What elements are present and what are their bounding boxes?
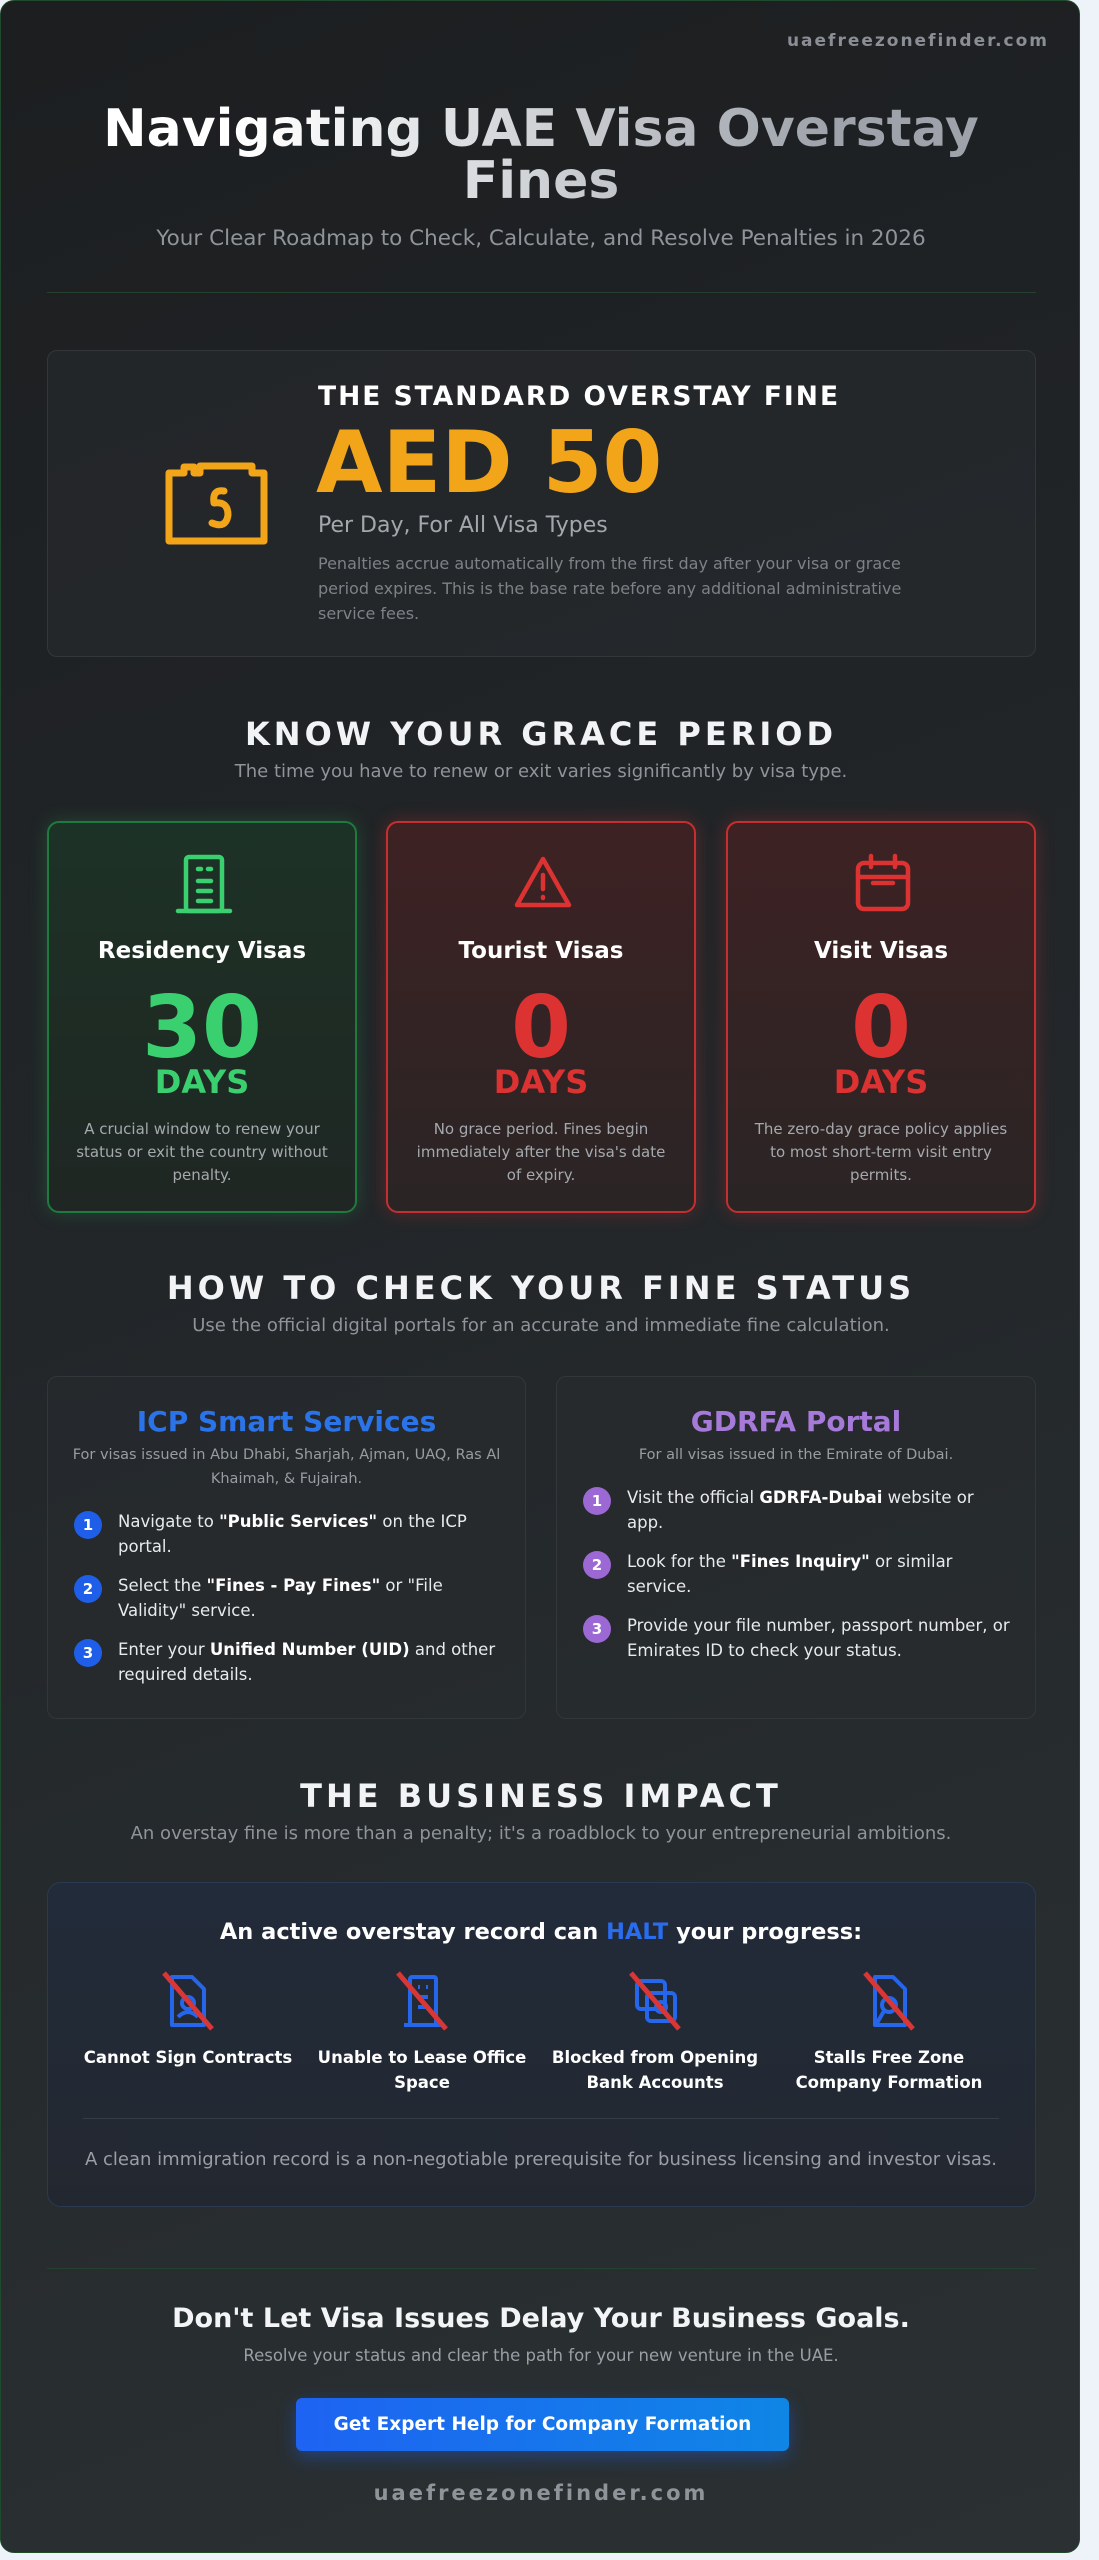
panel: ICP	[47, 1376, 526, 1719]
card: visit: DAYS	[834, 1063, 928, 1101]
card: residency: 30	[142, 978, 262, 1078]
heading: business impact: THE BUSINESS IMPACT	[300, 1777, 782, 1815]
description: Penalties accrue automatically from the first day after your visa or grace period expires. This is the base rate before any additional administrative service fees.	[318, 554, 901, 623]
step 3: 3	[592, 1620, 602, 1638]
impact: office	[318, 1971, 526, 2092]
CTA button: Get Expert Help for Company Formation	[334, 2414, 751, 2435]
panel: standard fine	[47, 350, 1036, 657]
impact: office: Unable to Lease Office Space	[318, 2048, 526, 2092]
watermark: top: uaefreezonefinder.com	[787, 31, 1049, 51]
ICP title: ICP Smart Services	[137, 1405, 436, 1438]
title: Navigating UAE Visa Overstay Fines	[103, 99, 979, 211]
per day: Per Day, For All Visa Types	[318, 513, 608, 538]
heading: how to check: HOW TO CHECK YOUR FINE STATUS	[167, 1269, 915, 1307]
subheading: An overstay fine is more than a penalty; it's a roadblock to your entrepreneurial ambitions.	[131, 1823, 951, 1844]
card: residency: A crucial window to renew your status or exit the country without penalty.	[76, 1120, 328, 1184]
heading: THE STANDARD OVERSTAY FINE	[318, 381, 840, 412]
big number: AED 50	[316, 413, 662, 513]
step 2: 2	[592, 1556, 602, 1574]
card: residency	[47, 821, 357, 1213]
panel: impact	[47, 1882, 1036, 2207]
subtitle: Your Clear Roadmap to Check, Calculate, and Resolve Penalties in 2026	[156, 226, 926, 251]
CTA sub: Resolve your status and clear the path for your new venture in the UAE.	[243, 2346, 839, 2365]
GDRFA title: GDRFA Portal	[691, 1405, 901, 1438]
impact footnote: A clean immigration record is a non-negotiable prerequisite for business licensing and investor visas.	[85, 2149, 997, 2170]
icon: building	[176, 854, 232, 914]
step 2: 2	[83, 1580, 93, 1598]
panel: GDRFA	[556, 1376, 1036, 1719]
heading: grace period: KNOW YOUR GRACE PERIOD	[245, 715, 837, 753]
icon: fine document	[166, 462, 268, 544]
card: tourist: 0	[511, 978, 571, 1078]
impact: free zone: Stalls Free Zone Company Formation	[796, 2048, 982, 2092]
card: visit: 0	[851, 978, 911, 1078]
ICP sub: For visas issued in Abu Dhabi, Sharjah, Ajman, UAQ, Ras Al Khaimah, & Fujairah.	[73, 1447, 500, 1487]
card: visit: The zero-day grace policy applies to most short-term visit entry permits.	[755, 1120, 1007, 1184]
step 3: Provide your file number, passport number, or Emirates ID to check your status.	[627, 1616, 1010, 1660]
step 2: Select the "Fines - Pay Fines" or "File Validity" service.	[118, 1576, 443, 1620]
GDRFA sub: For all visas issued in the Emirate of Dubai.	[639, 1447, 953, 1463]
card: tourist: Tourist Visas	[459, 938, 623, 964]
step 1: 1	[83, 1516, 93, 1534]
impact: bank: Blocked from Opening Bank Accounts	[552, 2048, 758, 2092]
card: residency: Residency Visas	[98, 938, 306, 964]
step 3: Enter your Unified Number (UID) and other required details.	[118, 1640, 495, 1684]
step 1: 1	[592, 1492, 602, 1510]
icon: calendar	[856, 854, 910, 912]
step 2: Look for the "Fines Inquiry" or similar service.	[627, 1552, 952, 1596]
subheading: Use the official digital portals for an accurate and immediate fine calculation.	[192, 1315, 890, 1336]
card: tourist: DAYS	[494, 1063, 588, 1101]
impact: contracts	[84, 1971, 292, 2067]
CTA heading: Don't Let Visa Issues Delay Your Business Goals.	[172, 2303, 910, 2334]
step 1: Visit the official GDRFA-Dubai website or app.	[627, 1488, 974, 1532]
card: visit: Visit Visas	[814, 938, 948, 964]
impact heading: An active overstay record can HALT your progress:	[220, 1919, 862, 1945]
card: visit	[726, 821, 1036, 1213]
footer url: uaefreezonefinder.com	[374, 2481, 708, 2505]
impact: free zone	[796, 1971, 982, 2092]
impact: contracts: Cannot Sign Contracts	[84, 2048, 292, 2067]
subheading: The time you have to renew or exit varies significantly by visa type.	[235, 761, 847, 782]
step 3: 3	[83, 1644, 93, 1662]
card: tourist: No grace period. Fines begin immediately after the visa's date of expiry.	[417, 1120, 665, 1184]
step 1: Navigate to "Public Services" on the ICP portal.	[118, 1512, 467, 1556]
icon: warning	[514, 856, 572, 908]
card: tourist	[386, 821, 696, 1213]
CTA button	[296, 2398, 789, 2451]
card: residency: DAYS	[155, 1063, 249, 1101]
impact: bank	[552, 1971, 758, 2092]
